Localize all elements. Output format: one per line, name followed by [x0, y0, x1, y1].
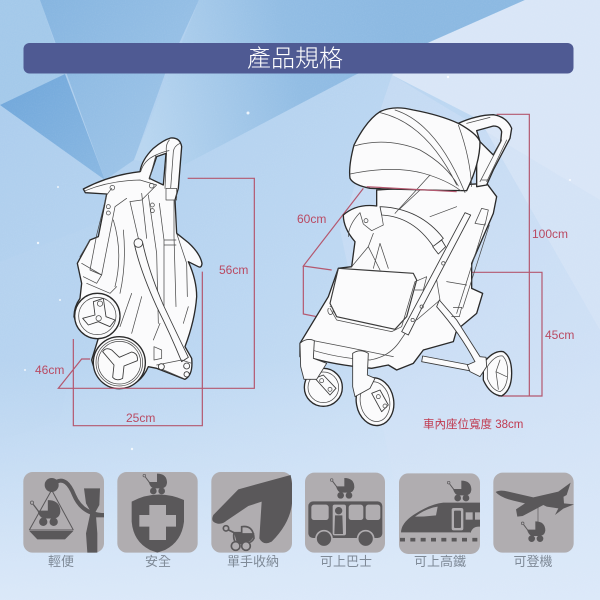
label: 25cm: 25cm	[126, 411, 155, 425]
label: 60cm: 60cm	[297, 212, 326, 226]
folded stroller dimension lines	[58, 178, 254, 426]
front left wheel	[300, 339, 342, 406]
caption: 可登機: 可登機	[513, 554, 553, 569]
rear wheel	[483, 351, 512, 396]
icon: one-hand fold	[211, 472, 292, 553]
icon: bus	[305, 473, 385, 553]
icon: high speed rail	[399, 473, 480, 554]
arm bar	[380, 207, 443, 247]
small wheel	[75, 293, 120, 339]
icon: airplane	[493, 473, 574, 553]
folded stroller drawing	[74, 138, 202, 389]
caption: 可上高鐵: 可上高鐵	[414, 554, 466, 569]
canopy	[350, 108, 480, 191]
label: 45cm: 45cm	[545, 328, 574, 342]
title bar: 產品規格	[247, 46, 343, 72]
caption: 安全: 安全	[145, 554, 171, 569]
caption: 單手收納: 單手收納	[227, 554, 279, 569]
frame tube	[402, 213, 471, 335]
title bar	[24, 43, 574, 74]
label: 56cm: 56cm	[219, 263, 248, 277]
canopy dimension line	[367, 187, 457, 192]
seat details	[307, 117, 507, 360]
large wheel	[93, 337, 145, 389]
open stroller dimension lines behind drawing	[303, 114, 542, 396]
handle	[458, 115, 512, 187]
seat, basket and bumper silhouette	[300, 183, 497, 370]
icon: lightweight	[23, 472, 104, 553]
caption: 輕便: 輕便	[48, 554, 74, 569]
rear leg	[437, 300, 487, 377]
caption: 可上巴士: 可上巴士	[320, 554, 372, 569]
icon: safety	[117, 472, 198, 553]
label: seat width: 車內座位寬度 38cm	[423, 417, 523, 431]
open stroller drawing	[300, 108, 512, 429]
axle	[422, 356, 470, 371]
front right wheel	[352, 351, 398, 429]
footrest cover	[330, 268, 417, 329]
label: 100cm: 100cm	[532, 227, 568, 241]
label: 46cm: 46cm	[35, 363, 64, 377]
